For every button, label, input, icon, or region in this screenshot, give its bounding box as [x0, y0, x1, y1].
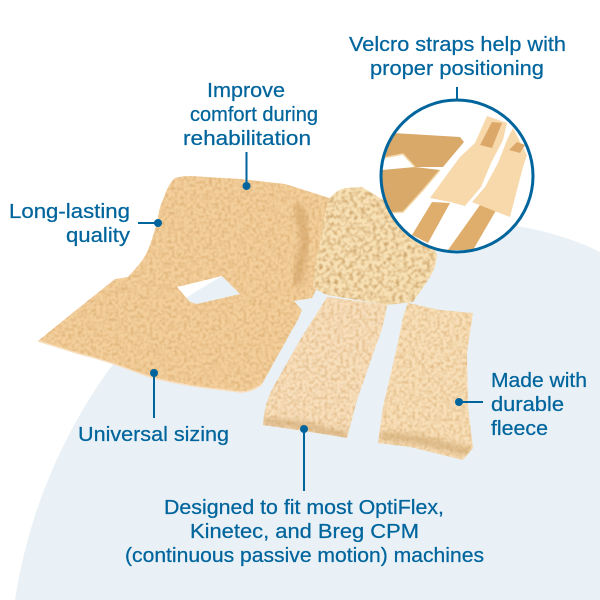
- callout: compatible machines: Designed to fit most OptiFlex,: [164, 496, 444, 519]
- callout: velcro straps: [349, 33, 566, 100]
- callout: long-lasting quality: [9, 200, 162, 247]
- webbing straps: [412, 202, 450, 243]
- callout: universal sizing: Universal sizing: [78, 423, 229, 446]
- left strap fleece backing: [430, 116, 507, 206]
- callout: made with durable fleece: fleece: [491, 417, 548, 440]
- callout: improve comfort: comfort during: [190, 103, 318, 126]
- product: fleece pads: [38, 176, 473, 460]
- callout: universal sizing: [78, 369, 229, 446]
- callout: improve comfort: rehabilitation: [183, 127, 311, 150]
- callout: long-lasting quality: Long-lasting: [9, 200, 130, 223]
- callout: long-lasting quality: quality: [66, 224, 131, 247]
- callout: compatible machines: (continuous passive motion) machines: [125, 544, 484, 567]
- inset circle: velcro straps detail: [370, 100, 533, 252]
- right side pad: [313, 187, 437, 305]
- callout: compatible machines: [125, 425, 484, 567]
- callout: compatible machines: Kinetec, and Breg CPM: [190, 520, 419, 543]
- background blob: [15, 220, 600, 600]
- folded pad underside: [385, 133, 464, 167]
- callout: made with durable fleece: Made with: [491, 369, 587, 392]
- pad fold shading: [296, 205, 306, 285]
- right strap fleece backing: [472, 128, 527, 217]
- callout: made with durable fleece: [455, 369, 587, 440]
- callout: made with durable fleece: durable: [491, 393, 564, 416]
- callout: velcro straps: Velcro straps help with: [349, 33, 566, 56]
- callout: improve comfort: [183, 79, 318, 190]
- centre strap pad: [263, 297, 387, 438]
- callout: improve comfort: Improve: [207, 79, 285, 102]
- main seat pad: [38, 176, 335, 392]
- callout: velcro straps: proper positioning: [370, 57, 544, 80]
- right strap pad: [378, 303, 473, 460]
